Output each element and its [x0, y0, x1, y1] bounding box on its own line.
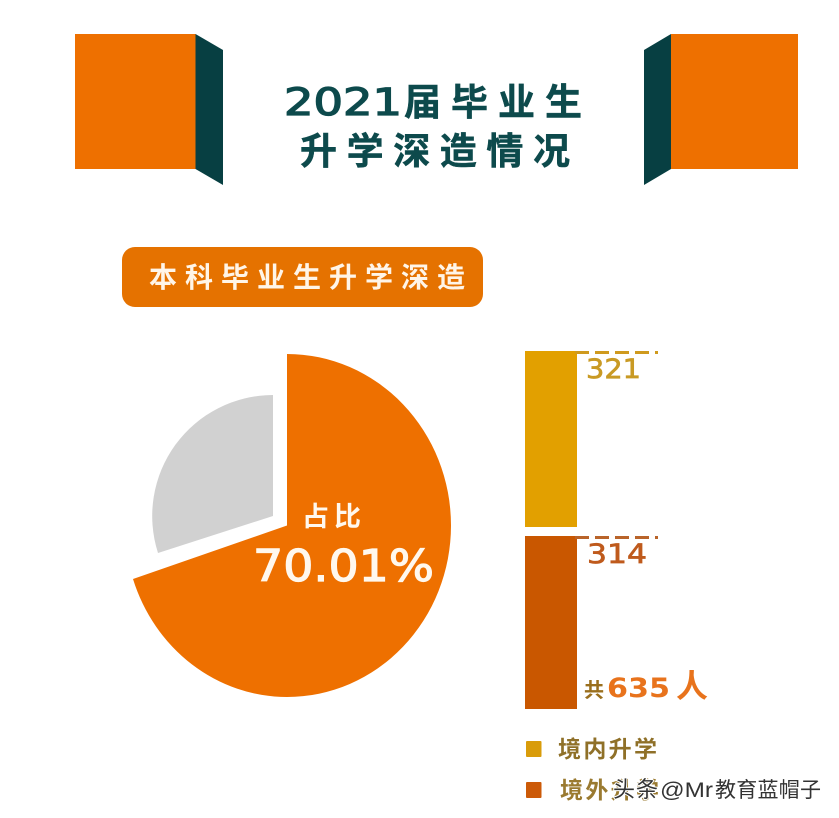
- title: 2021: [284, 81, 402, 124]
- total count: 人: [676, 661, 708, 707]
- pie slice: remainder: [152, 395, 273, 553]
- pie label: 占比: [302, 495, 361, 534]
- left banner block: [75, 34, 223, 185]
- title: [284, 72, 582, 175]
- watermark: 头条: [613, 772, 658, 804]
- bar: overseas 314: [525, 536, 658, 709]
- bar: domestic 321: [525, 351, 658, 527]
- pie chart: [133, 354, 451, 697]
- total count: 共: [584, 674, 604, 703]
- watermark: @Mr: [660, 779, 713, 802]
- right banner block: [644, 34, 798, 185]
- total count: [584, 661, 708, 707]
- title: 升学深造情况: [300, 121, 570, 175]
- bar: domestic 321: 321: [586, 354, 641, 385]
- legend: domestic: 境内升学: [558, 730, 657, 764]
- legend: overseas: 境外升学: [560, 771, 659, 805]
- title: 届毕业生: [404, 72, 582, 126]
- total count: 635: [607, 673, 670, 704]
- bar: overseas 314: 314: [587, 539, 647, 570]
- pie slice: 70.01%: [133, 354, 451, 697]
- pie value: 70.01%: [253, 541, 434, 592]
- watermark: [613, 772, 821, 804]
- watermark: 教育蓝帽子: [715, 774, 821, 804]
- section heading pill: [122, 247, 483, 307]
- section heading pill: 本科毕业生升学深造: [149, 256, 465, 296]
